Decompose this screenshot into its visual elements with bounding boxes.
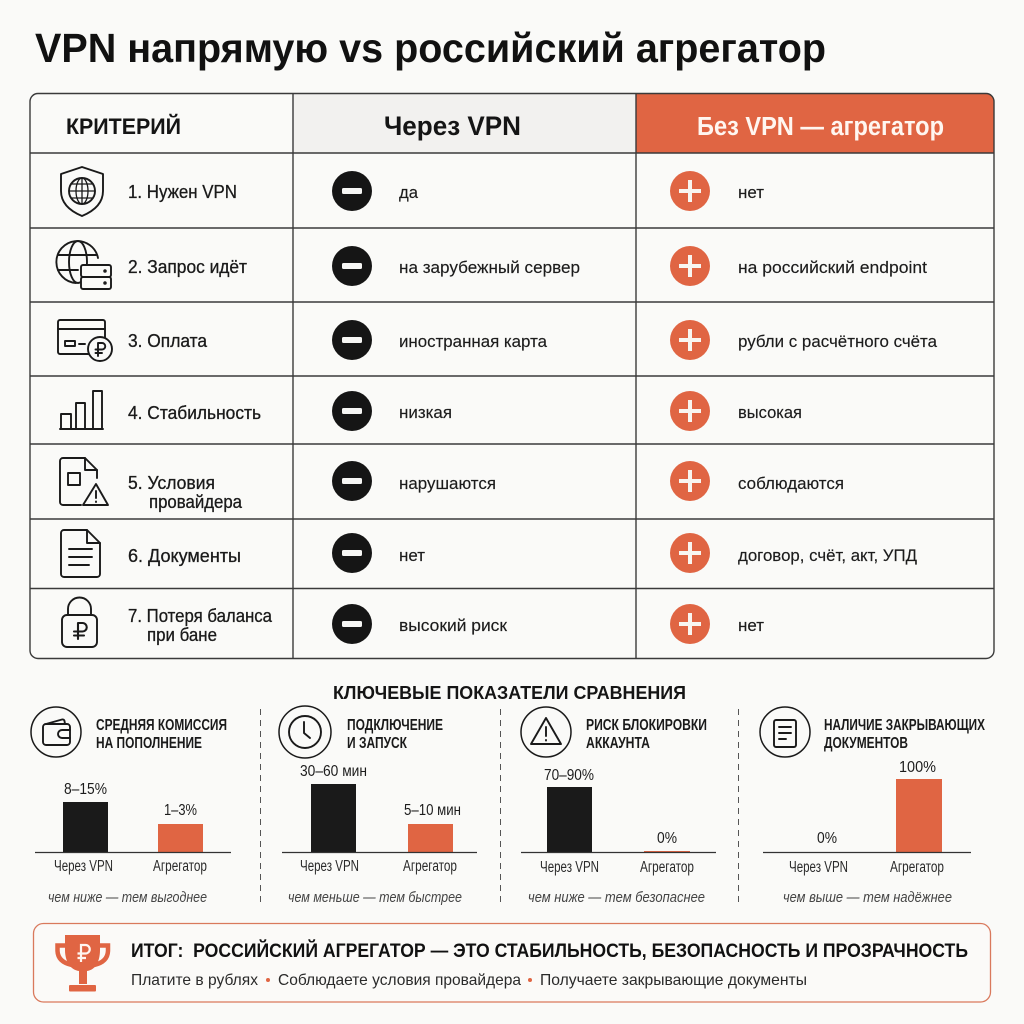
values: агрегатор: договор, счёт, акт, УПД bbox=[738, 546, 917, 565]
values: 30–60 мин bbox=[300, 763, 367, 780]
summary frame bbox=[34, 924, 990, 1002]
criterion 5: 5. Условия bbox=[128, 473, 215, 493]
section heading: КЛЮЧЕВЫЕ ПОКАЗАТЕЛИ СРАВНЕНИЯ bbox=[333, 682, 686, 703]
axis labels: Агрегатор bbox=[403, 858, 457, 875]
criterion 7 bbox=[128, 606, 273, 645]
title: VPN напрямую vs российский агрегатор bbox=[35, 25, 826, 71]
icon: shield globe bbox=[61, 167, 103, 216]
axis labels bbox=[789, 859, 944, 876]
bars bbox=[35, 802, 231, 852]
heading bbox=[586, 717, 707, 752]
note: чем ниже — тем безопаснее bbox=[528, 890, 705, 906]
bars bbox=[282, 784, 477, 852]
heading bbox=[347, 717, 443, 752]
values bbox=[544, 767, 677, 847]
values: агрегатор bbox=[738, 183, 938, 635]
values: 5–10 мин bbox=[404, 802, 461, 819]
axis labels: Через VPN bbox=[789, 859, 848, 876]
values: через VPN: иностранная карта bbox=[399, 332, 548, 351]
plus icons column bbox=[670, 171, 710, 644]
values: через VPN: на зарубежный сервер bbox=[399, 258, 580, 277]
panel: block risk chart bbox=[521, 707, 716, 906]
axis labels: Агрегатор bbox=[890, 859, 944, 876]
axis labels: Агрегатор bbox=[640, 859, 694, 876]
axis labels bbox=[54, 858, 207, 875]
icon: document in circle bbox=[760, 707, 810, 757]
summary heading: ИТОГ: РОССИЙСКИЙ АГРЕГАТОР — ЭТО СТАБИЛЬНОСТЬ, БЕЗОПАСНОСТЬ И ПРОЗРАЧНОСТЬ bbox=[131, 940, 968, 962]
values: агрегатор: соблюдаются bbox=[738, 474, 844, 493]
summary points bbox=[131, 972, 807, 989]
panel: summary bbox=[34, 924, 990, 1002]
values: 8–15% bbox=[64, 781, 107, 798]
values: через VPN bbox=[399, 183, 580, 635]
values: через VPN: нет bbox=[399, 546, 425, 565]
criterion 4: 4. Стабильность bbox=[128, 403, 261, 423]
values: через VPN: нарушаются bbox=[399, 474, 496, 493]
values: 0% bbox=[657, 830, 677, 847]
axis labels: Через VPN bbox=[300, 858, 359, 875]
values: 70–90% bbox=[544, 767, 594, 784]
summary points: Получаете закрывающие документы bbox=[540, 972, 807, 989]
heading bbox=[96, 717, 227, 752]
bars bbox=[763, 779, 971, 852]
bars bbox=[521, 787, 716, 852]
icon: globe with server bbox=[56, 241, 111, 289]
axis labels bbox=[540, 859, 694, 876]
panel: comparison table bbox=[30, 94, 994, 658]
panel: closing documents chart bbox=[760, 707, 985, 906]
values: агрегатор: рубли с расчётного счёта bbox=[738, 332, 938, 351]
values bbox=[817, 759, 936, 847]
heading: СРЕДНЯЯ КОМИССИЯ bbox=[96, 717, 227, 734]
icon: stability bars bbox=[60, 391, 103, 429]
table grid bbox=[30, 94, 994, 658]
header cell: через VPN background bbox=[293, 94, 636, 153]
heading: ПОДКЛЮЧЕНИЕ bbox=[347, 717, 443, 734]
axis labels: Агрегатор bbox=[153, 858, 207, 875]
icon: wallet bbox=[31, 707, 81, 757]
heading: И ЗАПУСК bbox=[347, 735, 407, 752]
heading: ДОКУМЕНТОВ bbox=[824, 735, 908, 752]
header cell: агрегатор background bbox=[636, 94, 994, 153]
criterion 3: 3. Оплата bbox=[128, 331, 208, 351]
panel: commission chart bbox=[31, 707, 231, 906]
criterion 6: 6. Документы bbox=[128, 546, 241, 566]
criterion 2: 2. Запрос идёт bbox=[128, 257, 247, 277]
criterion 7: при бане bbox=[147, 625, 217, 645]
note: чем выше — тем надёжнее bbox=[783, 890, 952, 906]
note: чем ниже — тем выгоднее bbox=[48, 890, 207, 906]
icon: document bbox=[61, 530, 100, 577]
axis labels: Через VPN bbox=[540, 859, 599, 876]
values: 1–3% bbox=[164, 802, 197, 819]
panel: connection chart bbox=[279, 706, 477, 906]
icon: lock with rouble bbox=[62, 598, 97, 647]
summary points: Платите в рублях bbox=[131, 972, 258, 989]
heading: РИСК БЛОКИРОВКИ bbox=[586, 717, 707, 734]
values: 100% bbox=[899, 759, 936, 776]
values: агрегатор: нет bbox=[738, 616, 764, 635]
values: через VPN: низкая bbox=[399, 403, 452, 422]
column heading: без VPN: Без VPN — агрегатор bbox=[697, 113, 944, 141]
column heading: критерий: КРИТЕРИЙ bbox=[66, 114, 181, 139]
criterion 7: 7. Потеря баланса bbox=[128, 606, 273, 626]
values: 0% bbox=[817, 830, 837, 847]
axis labels bbox=[300, 858, 457, 875]
icon: card with rouble bbox=[58, 320, 112, 361]
values: через VPN: да bbox=[399, 183, 419, 202]
values bbox=[300, 763, 461, 819]
values: агрегатор: на российский endpoint bbox=[738, 258, 927, 277]
icon: document with warning bbox=[60, 458, 108, 505]
criterion 1: 1. Нужен VPN bbox=[128, 182, 237, 202]
icon: clock bbox=[279, 706, 331, 758]
note: чем меньше — тем быстрее bbox=[288, 890, 462, 906]
values bbox=[64, 781, 197, 819]
icon: trophy bbox=[58, 935, 108, 992]
summary points: Соблюдаете условия провайдера bbox=[278, 972, 521, 989]
values: агрегатор: высокая bbox=[738, 403, 802, 422]
column heading: через VPN: Через VPN bbox=[384, 111, 521, 141]
criterion 5: провайдера bbox=[149, 492, 243, 512]
heading bbox=[824, 717, 985, 752]
minus icons column bbox=[332, 171, 372, 644]
values: агрегатор: нет bbox=[738, 183, 764, 202]
icon: warning bbox=[521, 707, 571, 757]
values: через VPN: высокий риск bbox=[399, 616, 508, 635]
heading: АККАУНТА bbox=[586, 735, 650, 752]
axis labels: Через VPN bbox=[54, 858, 113, 875]
dashed dividers bbox=[260, 709, 738, 902]
heading: НА ПОПОЛНЕНИЕ bbox=[96, 735, 202, 752]
criterion 5 bbox=[128, 473, 243, 512]
